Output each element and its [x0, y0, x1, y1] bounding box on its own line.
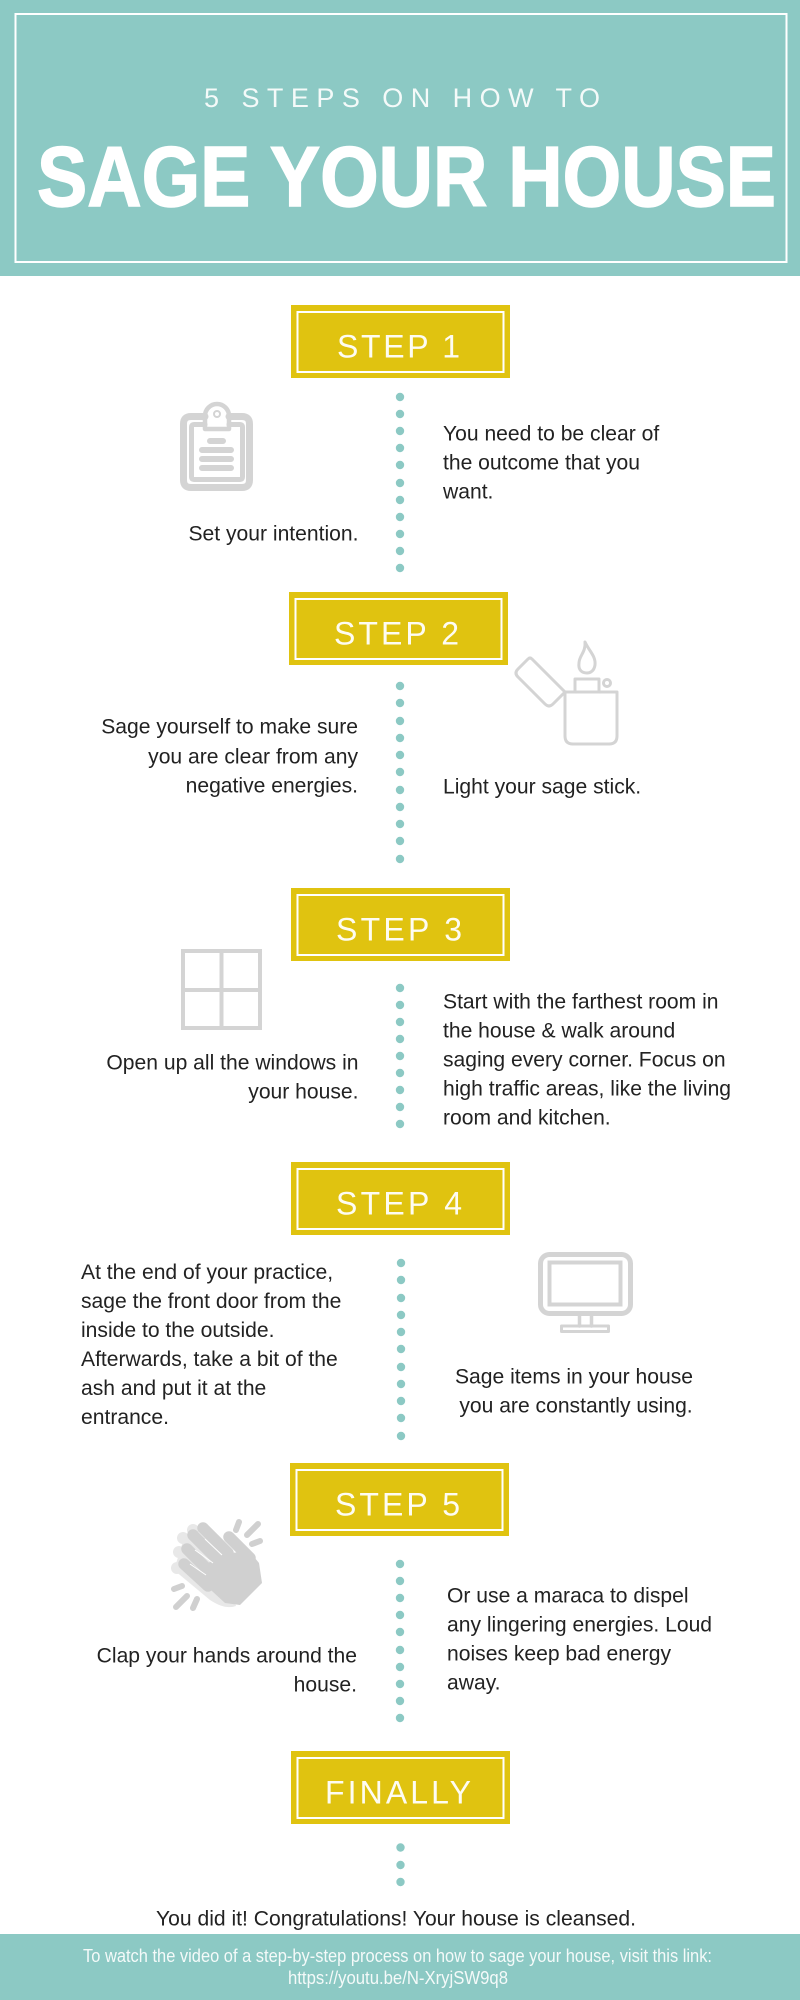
text: front door: [81, 1261, 341, 1429]
text: sage yourself: [101, 716, 358, 798]
text: clap your hands: Clap your hands around the: [97, 1644, 357, 1668]
text: front door: inside to the outside.: [81, 1319, 274, 1342]
finally badge: FINALLY: [325, 1774, 471, 1810]
text: front door: ash and put it at the: [81, 1377, 266, 1400]
dotted connector: [397, 1259, 405, 1440]
text: set your intention: Set your intention.: [188, 522, 358, 546]
footer: https://youtu.be/N-XryjSW9q8: [288, 1968, 508, 1988]
step 3 badge: [291, 888, 510, 961]
dotted connector: [396, 984, 404, 1128]
text: sage items: [455, 1366, 693, 1418]
finally badge: [291, 1751, 510, 1824]
icon: window: [183, 951, 260, 1028]
text: farthest room: Start with the farthest room in: [443, 990, 719, 1014]
text: farthest room: saging every corner. Focus on: [443, 1048, 726, 1072]
text: sage yourself: you are clear from any: [148, 746, 358, 768]
text: farthest room: high traffic areas, like the living: [443, 1078, 731, 1100]
panel: step 4: [81, 1162, 693, 1440]
step 5 badge: STEP 5: [335, 1486, 460, 1522]
panel: step 5: [97, 1463, 712, 1722]
dotted connector: [396, 1560, 404, 1722]
panel: step 1: [184, 305, 659, 572]
step 1 badge: [291, 305, 510, 378]
text: maraca: any lingering energies. Loud: [447, 1614, 712, 1636]
text: sage yourself: Sage yourself to make sure: [101, 716, 358, 738]
text: clear outcome: want.: [442, 480, 493, 504]
subtitle: 5 STEPS ON HOW TO: [204, 83, 600, 113]
text: farthest room: [443, 990, 731, 1130]
text: congratulations: You did it! Congratulations! Your house is cleansed.: [156, 1908, 636, 1930]
text: maraca: Or use a maraca to dispel: [447, 1584, 689, 1608]
text: clap your hands: [97, 1644, 357, 1696]
step 1 badge: STEP 1: [337, 328, 460, 364]
icon: monitor: [540, 1254, 630, 1332]
icon: clipboard: [184, 404, 250, 488]
icon: lighter: [516, 642, 617, 744]
text: maraca: [447, 1584, 712, 1694]
text: sage yourself: negative energies.: [186, 774, 358, 798]
footer: To watch the video of a step-by-step process on how to sage your house, visit this link:: [83, 1946, 712, 1966]
panel: step 2: [101, 592, 641, 863]
text: clear outcome: [442, 422, 659, 504]
step 5 badge: [290, 1463, 509, 1536]
step 2 badge: STEP 2: [334, 616, 459, 652]
text: maraca: noises keep bad energy: [447, 1642, 671, 1666]
icon: clapping hands: [171, 1522, 262, 1608]
step 3 badge: STEP 3: [336, 912, 462, 948]
text: farthest room: room and kitchen.: [443, 1106, 611, 1130]
text: front door: Afterwards, take a bit of the: [81, 1348, 338, 1371]
text: sage items: you are constantly using.: [459, 1394, 693, 1418]
dotted connector: [396, 393, 404, 572]
text: front door: entrance.: [81, 1406, 169, 1429]
step 2 badge: [289, 592, 508, 665]
header banner: [0, 0, 800, 276]
text: sage items: Sage items in your house: [455, 1366, 693, 1388]
step 4 badge: [291, 1162, 510, 1235]
text: farthest room: the house & walk around: [443, 1020, 675, 1042]
text: clear outcome: the outcome that you: [443, 452, 640, 474]
footer: [0, 1934, 800, 2000]
text: light your sage stick: Light your sage stick.: [443, 776, 641, 798]
panel: step 3: [106, 888, 731, 1130]
text: open windows: your house.: [248, 1080, 358, 1104]
text: maraca: away.: [447, 1672, 501, 1694]
text: open windows: [106, 1052, 358, 1104]
text: open windows: Open up all the windows in: [106, 1052, 358, 1074]
dotted connector: [396, 682, 404, 863]
panel: finally: [156, 1751, 636, 1930]
text: front door: sage the front door from the: [81, 1290, 341, 1313]
text: clap your hands: house.: [294, 1674, 357, 1696]
step 4 badge: STEP 4: [336, 1186, 462, 1222]
dotted connector: [396, 1843, 405, 1886]
text: front door: At the end of your practice,: [81, 1261, 333, 1284]
text: clear outcome: You need to be clear of: [443, 422, 659, 446]
